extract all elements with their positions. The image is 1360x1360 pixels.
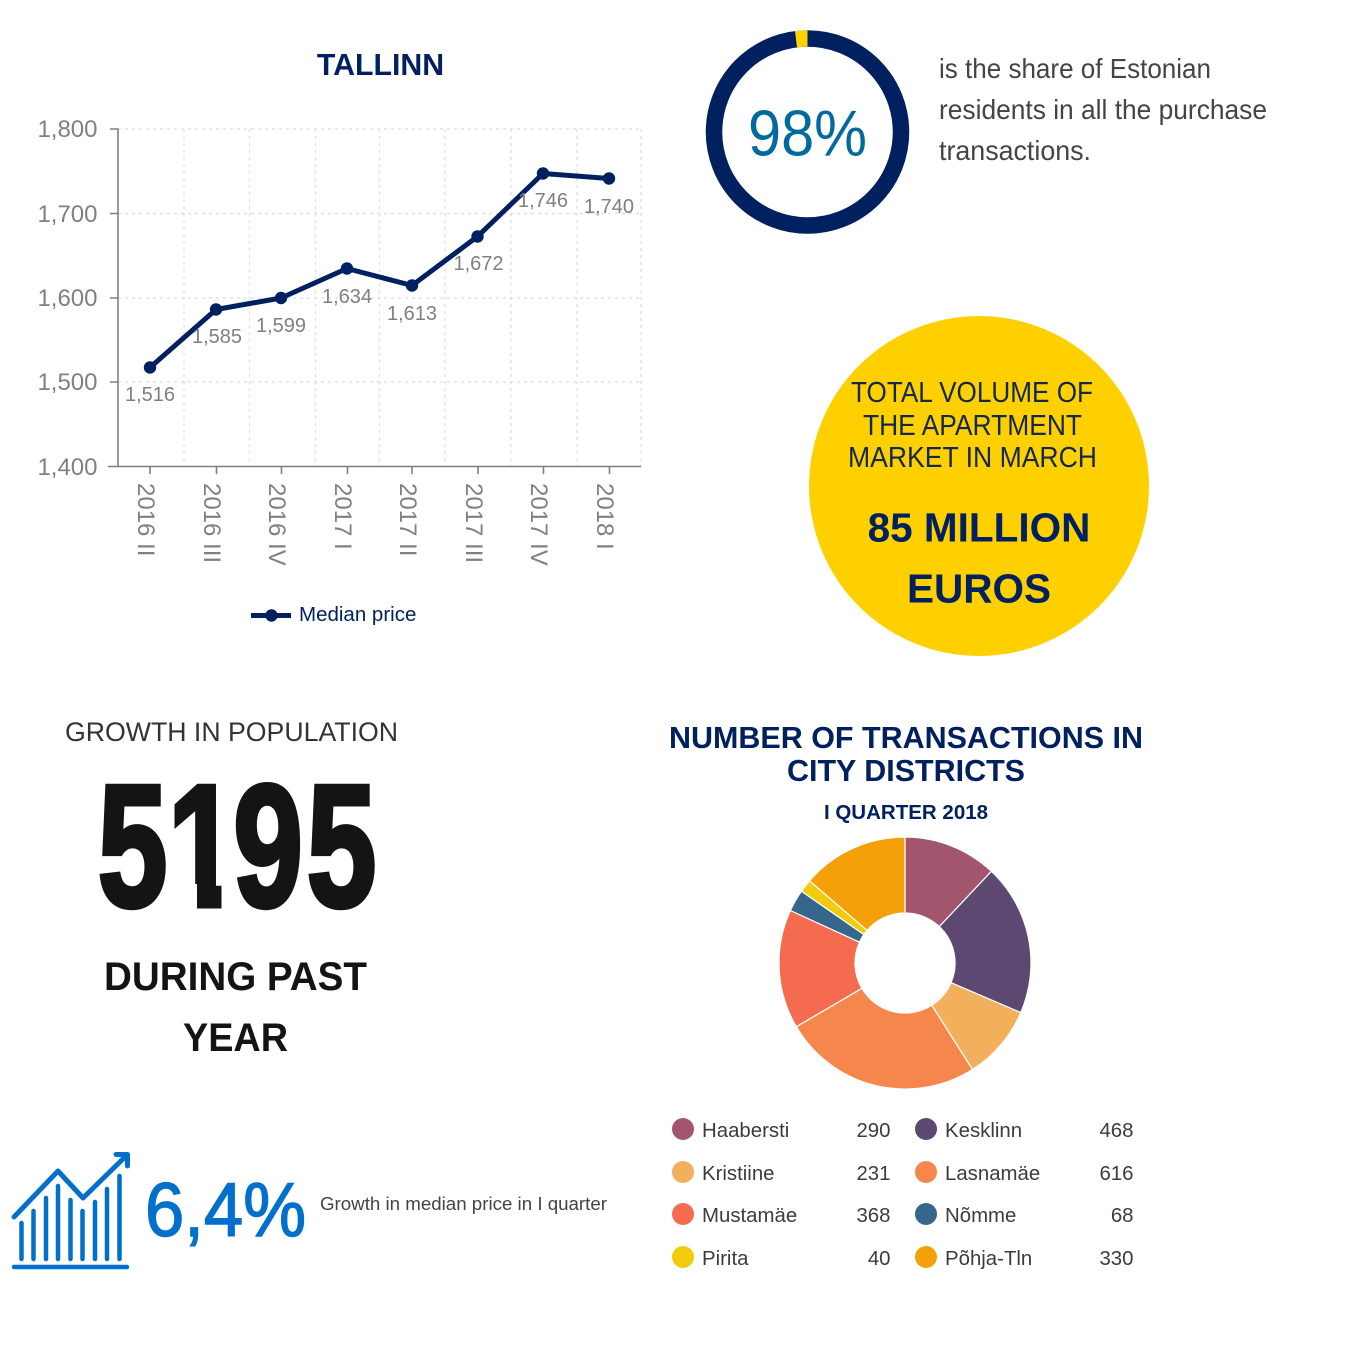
- x axis labels: 2016 II: [132, 483, 159, 556]
- panel: total volume yellow circle: [809, 316, 1149, 656]
- pie legend: 330: [1099, 1248, 1134, 1270]
- pie legend: Pirita: [702, 1248, 749, 1270]
- grid lines: [118, 129, 641, 466]
- x axis labels: 2016 IV: [263, 483, 290, 566]
- volume value: 85 MILLION: [868, 504, 1090, 550]
- data labels: 1,634: [322, 286, 372, 308]
- x axis labels: 2018 I: [591, 483, 618, 550]
- y axis labels: 1,800: [37, 116, 98, 143]
- data labels: [125, 190, 634, 406]
- volume value: EUROS: [907, 566, 1051, 612]
- data labels: 1,599: [256, 315, 306, 337]
- panel: Tallinn line chart: [37, 49, 641, 626]
- yellow circle: [809, 316, 1149, 656]
- x axis labels: 2016 III: [198, 483, 225, 563]
- percentage value: 98%: [748, 96, 867, 170]
- panel: 98% share: [714, 38, 1267, 225]
- volume caption: [848, 377, 1097, 474]
- volume caption: MARKET IN MARCH: [848, 442, 1097, 474]
- description text: transactions.: [939, 135, 1091, 166]
- growth caption: Growth in median price in I quarter: [320, 1194, 607, 1214]
- pie title: NUMBER OF TRANSACTIONS IN: [669, 720, 1143, 755]
- chart title: TALLINN: [317, 49, 444, 82]
- pie legend: 68: [1111, 1205, 1134, 1227]
- data labels: 1,740: [584, 196, 634, 218]
- x axis labels: [132, 483, 618, 566]
- y axis labels: 1,600: [37, 285, 98, 312]
- growth value: 6,4%: [145, 1168, 306, 1253]
- pie legend: Kristiine: [702, 1163, 775, 1185]
- donut chart: [779, 837, 1031, 1089]
- x axis labels: 2017 IV: [525, 483, 552, 566]
- panel: median price growth: [14, 1154, 607, 1267]
- pie legend: 231: [856, 1163, 890, 1185]
- y axis labels: 1,700: [37, 201, 98, 228]
- pie title: CITY DISTRICTS: [787, 753, 1025, 788]
- y axis labels: 1,500: [37, 369, 98, 396]
- panel: transactions by district: [669, 720, 1143, 1270]
- pie legend: 368: [856, 1205, 890, 1227]
- pie legend: Kesklinn: [945, 1120, 1022, 1142]
- panel: population growth: [65, 717, 398, 1060]
- x axis labels: 2017 I: [329, 483, 356, 550]
- x axis labels: 2017 III: [460, 483, 487, 563]
- median price line: [144, 167, 615, 374]
- data labels: 1,585: [192, 326, 242, 348]
- data labels: 1,746: [518, 190, 568, 212]
- pie legend: Haabersti: [702, 1120, 789, 1142]
- pie subtitle: I QUARTER 2018: [824, 801, 988, 824]
- description text: is the share of Estonian: [939, 53, 1211, 84]
- volume value: [868, 504, 1090, 612]
- pie legend: [672, 1118, 1134, 1270]
- pie legend: Lasnamäe: [945, 1163, 1040, 1185]
- x axis labels: 2017 II: [394, 483, 421, 556]
- pie legend: Nõmme: [945, 1205, 1016, 1227]
- volume caption: TOTAL VOLUME OF: [851, 377, 1093, 409]
- pie title: [669, 720, 1143, 788]
- population heading: GROWTH IN POPULATION: [65, 717, 398, 747]
- y axis labels: 1,400: [37, 454, 98, 481]
- pie legend: 290: [856, 1120, 890, 1142]
- data labels: 1,613: [387, 303, 437, 325]
- description text: residents in all the purchase: [939, 94, 1267, 125]
- pie legend: 616: [1099, 1163, 1134, 1185]
- population caption: YEAR: [183, 1016, 288, 1060]
- pie legend: 40: [868, 1248, 890, 1270]
- population caption: [104, 955, 367, 1060]
- population caption: DURING PAST: [104, 955, 367, 999]
- y axis labels: [37, 116, 98, 481]
- axes: [108, 128, 641, 474]
- icon: rising bar chart: [14, 1154, 128, 1267]
- pie legend: Põhja-Tln: [945, 1248, 1032, 1270]
- pie legend: Mustamäe: [702, 1205, 797, 1227]
- data labels: 1,516: [125, 384, 175, 406]
- pie legend: 468: [1099, 1120, 1134, 1142]
- chart legend: Median price: [299, 603, 416, 626]
- progress ring: [714, 38, 901, 225]
- data labels: 1,672: [453, 253, 504, 275]
- volume caption: THE APARTMENT: [863, 410, 1082, 442]
- population number: 5195: [98, 750, 376, 944]
- description text: [939, 53, 1267, 166]
